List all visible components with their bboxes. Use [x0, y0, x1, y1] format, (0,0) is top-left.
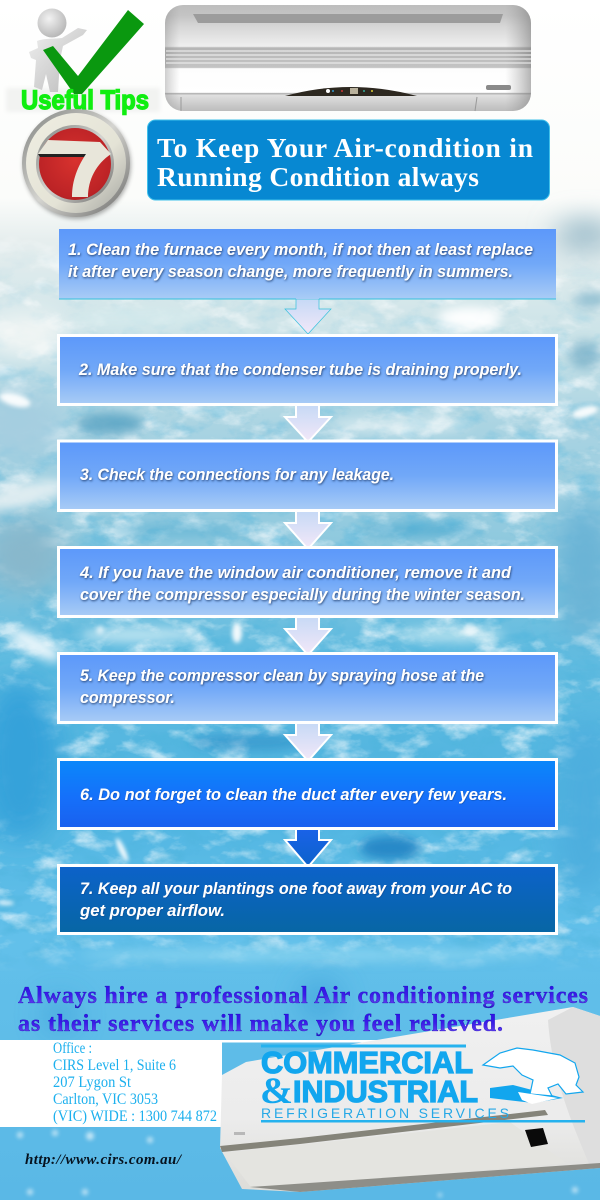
office address: CIRS Level 1, Suite 6: [53, 1057, 176, 1074]
icon: 3D person: [6, 8, 160, 112]
control panel: [285, 87, 417, 96]
step 7 panel: get proper airflow.: [79, 901, 225, 920]
closing message: as their services will make you feel relieved.: [18, 1011, 503, 1037]
illustration: wall air conditioner: [165, 5, 531, 111]
closing message: Always hire a professional Air conditioning services: [18, 983, 588, 1009]
office address: (VIC) WIDE : 1300 744 872: [53, 1108, 217, 1125]
step 1 panel: it after every season change, more frequently in summers.: [68, 262, 513, 281]
office address: [53, 1040, 217, 1125]
icon: green check: [43, 10, 144, 94]
step 7 panel: [58, 866, 556, 934]
office address: Carlton, VIC 3053: [53, 1091, 158, 1108]
step 5 panel: 5. Keep the compressor clean by spraying hose at the: [80, 666, 484, 685]
step 1 panel: [59, 229, 556, 299]
badge: number 7 emblem: [22, 109, 131, 219]
arrow: step 2 to 3: [285, 405, 331, 442]
logo: Commercial & Industrial Refrigeration Services: COMMERCIAL: [261, 1045, 473, 1080]
brand badge: [486, 85, 511, 90]
title text: Running Condition always: [157, 161, 479, 192]
logo: Commercial & Industrial Refrigeration Services: REFRIGERATION SERVICES: [261, 1105, 509, 1121]
band top strip: [222, 1040, 382, 1042]
logo: Commercial & Industrial Refrigeration Services: [260, 1044, 585, 1122]
title text: [157, 132, 533, 192]
step 5 panel: compressor.: [80, 688, 175, 707]
icon: person with green check mark: [6, 8, 160, 115]
step 5 panel: [58, 654, 556, 722]
illustration: lower air conditioner: [220, 1007, 600, 1192]
step 3 panel: [58, 441, 556, 510]
arrow: step 4 to 5: [285, 616, 331, 655]
step 2 panel: 2. Make sure that the condenser tube is draining properly.: [78, 360, 522, 379]
step 4 panel: 4. If you have the window air conditioner, remove it and: [79, 563, 512, 582]
logo: Commercial & Industrial Refrigeration Services: INDUSTRIAL: [293, 1074, 478, 1109]
step 7 panel: 7. Keep all your plantings one foot away from your AC to: [80, 879, 512, 898]
office address: 207 Lygon St: [53, 1074, 132, 1091]
step 4 panel: cover the compressor especially during the winter season.: [80, 585, 525, 604]
closing message: [18, 983, 588, 1037]
website url: http://www.cirs.com.au/: [25, 1152, 183, 1168]
step 2 panel: [58, 336, 556, 404]
label: Useful Tips: Useful Tips: [21, 85, 149, 115]
office address: Office :: [53, 1040, 92, 1057]
logo: Commercial & Industrial Refrigeration Services: &: [260, 1071, 293, 1112]
arrow: step 1 to 2: [285, 299, 331, 334]
arrow: step 6 to 7: [285, 829, 331, 867]
arrow: step 5 to 6: [285, 723, 331, 761]
icon: polar bear on ice: [483, 1048, 583, 1104]
arrow: step 3 to 4: [285, 511, 331, 549]
step 4 panel: [58, 548, 556, 616]
contact band: [0, 1040, 222, 1127]
step 1 panel: 1. Clean the furnace every month, if not then at least replace: [68, 240, 533, 259]
step 6 panel: 6. Do not forget to clean the duct after every few years.: [80, 785, 507, 804]
step 3 panel: 3. Check the connections for any leakage.: [80, 465, 394, 484]
step 6 panel: [58, 760, 556, 828]
title text: To Keep Your Air-condition in: [157, 132, 533, 163]
title banner: [148, 120, 550, 200]
